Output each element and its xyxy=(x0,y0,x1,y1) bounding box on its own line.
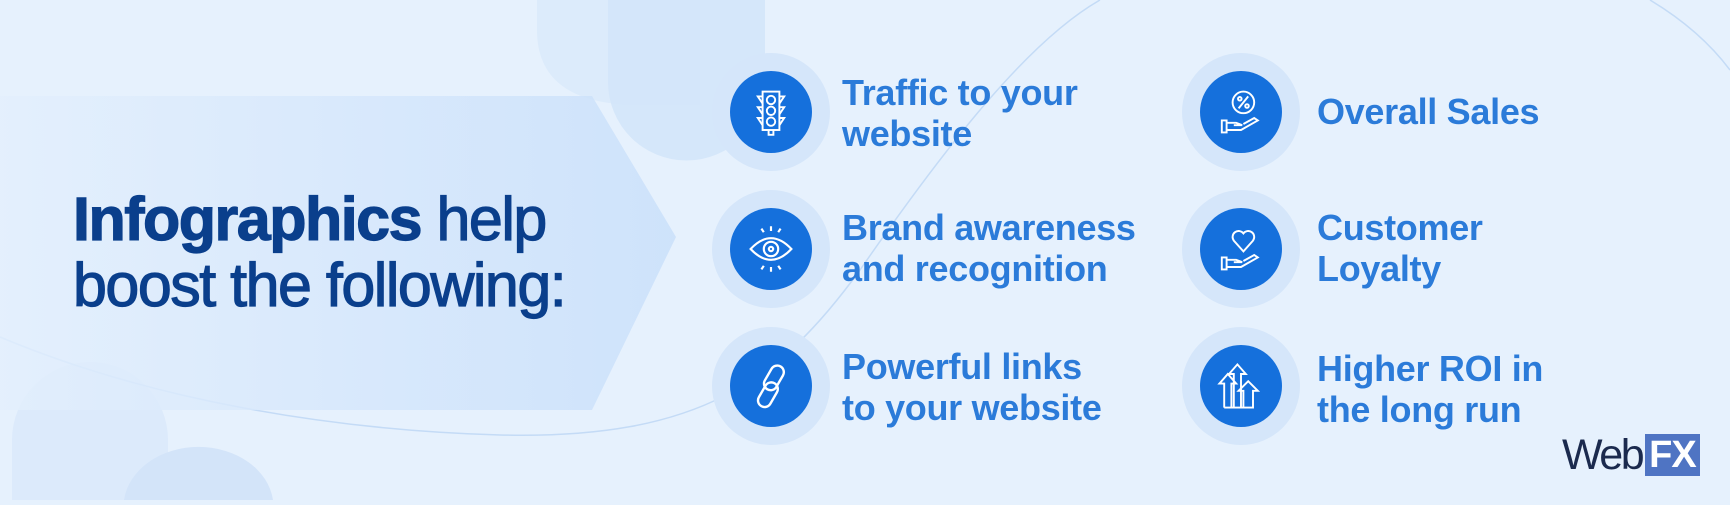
title xyxy=(73,185,565,320)
label: Powerful links xyxy=(842,346,1082,387)
label: the long run xyxy=(1317,389,1521,430)
label: to your website xyxy=(842,387,1102,428)
logo: WebFX xyxy=(1562,431,1700,479)
label: Brand awareness xyxy=(842,207,1136,248)
label xyxy=(842,72,1078,154)
label xyxy=(842,346,1102,428)
icon: eye xyxy=(712,190,830,308)
logo: WebFX: FX xyxy=(1649,434,1696,476)
label: Overall Sales xyxy=(1317,91,1539,132)
label xyxy=(1317,348,1543,430)
label xyxy=(842,207,1136,289)
label: website xyxy=(842,113,972,154)
item: loyalty xyxy=(1182,190,1483,308)
icon: percent hand xyxy=(1182,53,1300,171)
title: boost the following: xyxy=(73,251,565,319)
item: brand xyxy=(712,190,1136,308)
label: Loyalty xyxy=(1317,248,1441,289)
label xyxy=(1317,207,1483,289)
icon: traffic light xyxy=(712,53,830,171)
label: Customer xyxy=(1317,207,1483,248)
icon: up arrows xyxy=(1182,327,1300,445)
item: roi xyxy=(1182,327,1543,445)
label: Traffic to your xyxy=(842,72,1078,113)
icon: heart hand xyxy=(1182,190,1300,308)
arrow panel xyxy=(0,96,676,410)
label: and recognition xyxy=(842,248,1108,289)
title: Infographics help xyxy=(73,185,546,253)
item: links xyxy=(712,327,1102,445)
icon: chain link xyxy=(712,327,830,445)
item: traffic xyxy=(726,53,1078,171)
item: sales xyxy=(1182,53,1539,171)
logo: WebFX: Web xyxy=(1562,431,1642,479)
label: Higher ROI in xyxy=(1317,348,1543,389)
